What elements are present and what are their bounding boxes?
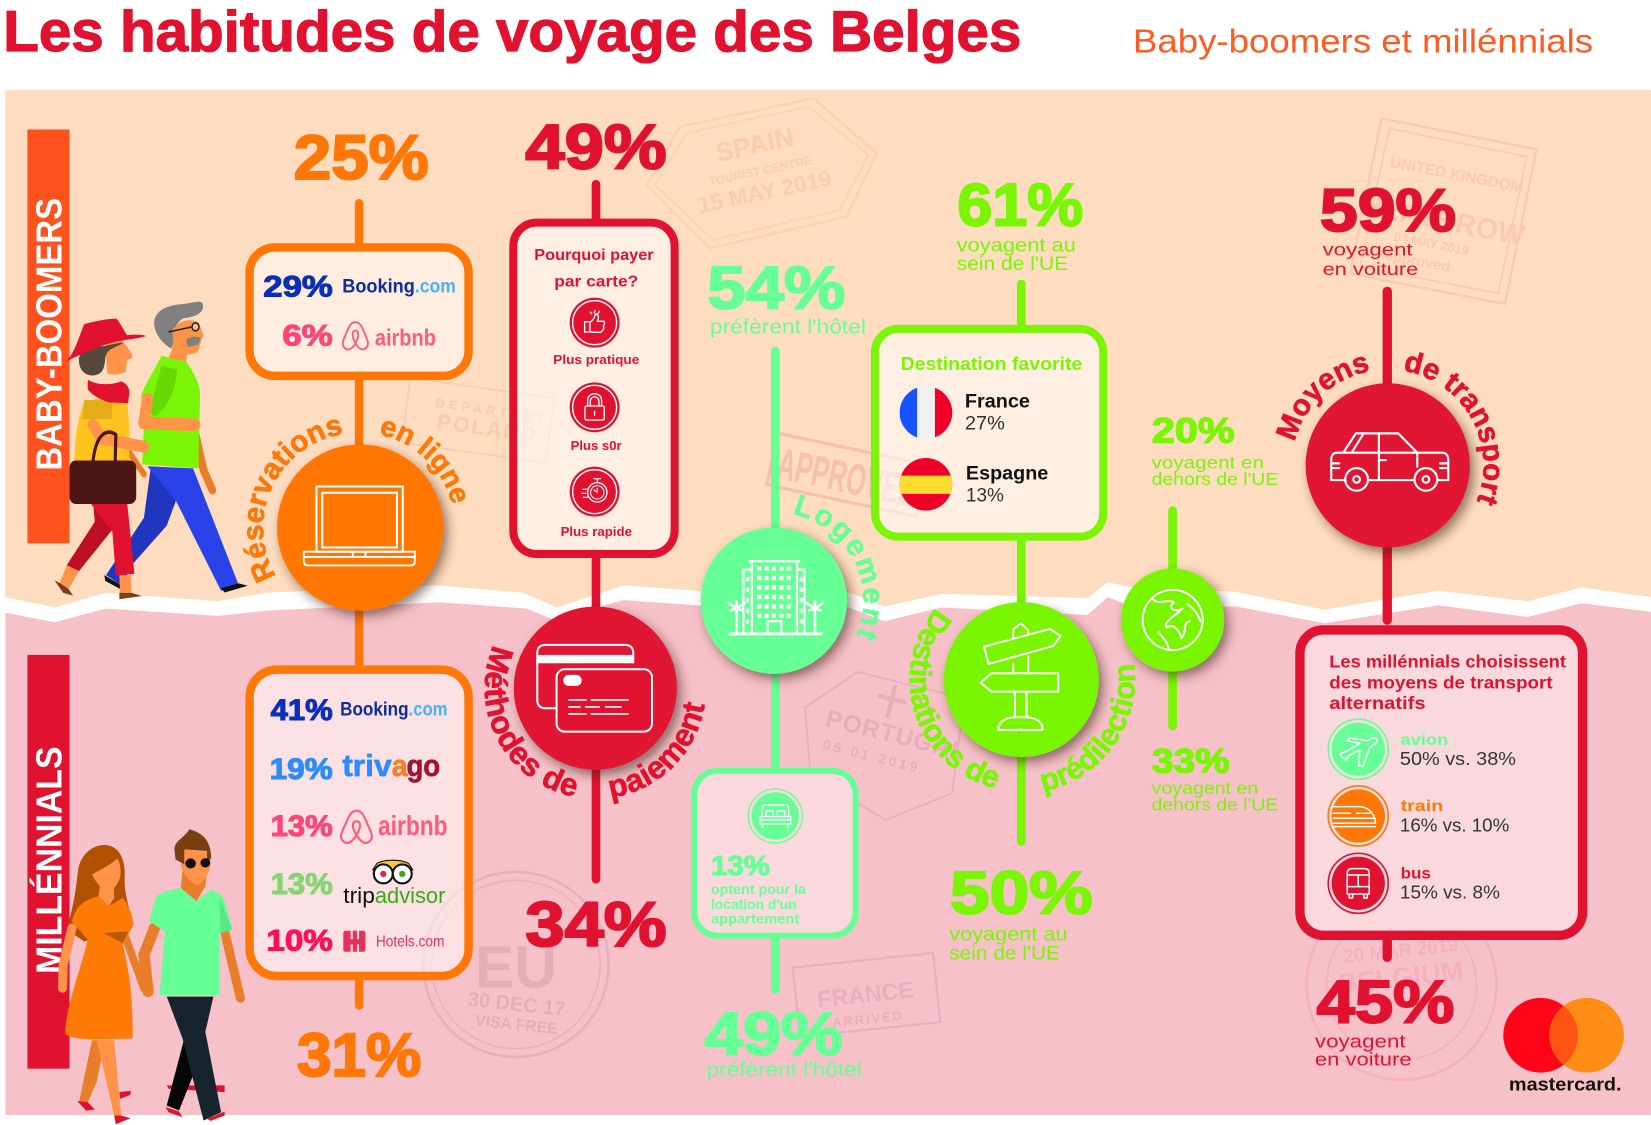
circle: credit cards icon [514,607,677,770]
stamp: Spain: SPAIN [713,122,797,168]
label: Baby-boomers [27,130,70,543]
box: millennial booking sites: 13% [271,810,333,843]
box: millennial booking sites: airbnb [378,810,448,841]
stat: baby-boomers 25%: 25% [294,123,429,193]
caption: travel outside EU [1152,778,1278,815]
box: millennial booking sites: 41% [271,694,333,727]
stat: millennials 45%: 45% [1317,968,1454,1036]
caption: travel outside EU [1152,452,1278,489]
curved heading: Destinations de prédilection: prédilection [1040,664,1136,798]
panel: payment methods [484,112,705,960]
caption: travel outside EU: dehors de l'UE [1152,795,1278,815]
box: baby-boomer booking sites: 6% [282,319,333,352]
box: apartment rental [694,771,856,936]
stamp: United Kingdom: UNITED KINGDOM [1388,154,1525,197]
box: millennials alternative transport: Les millénnials choisissent [1329,651,1566,671]
stamp: Portugal: 05 01 2019 [821,737,922,776]
stamp: EU: VISA FREE [474,1012,558,1038]
box: millennials alternative transport: avion [1401,732,1448,749]
box: why pay by card [513,223,675,554]
stat: baby-boomers 20%: 20% [1152,411,1235,450]
icon: train [1328,786,1388,846]
box: why pay by card: Pourquoi payer [534,247,654,264]
box: millennial booking sites: triv [342,749,392,783]
caption: travel by car [1323,240,1418,279]
box: millennials alternative transport: alternatifs [1329,693,1426,713]
stamp: EU [423,872,609,1057]
curved heading: Méthodes de paiement: Méthodes de [484,646,577,796]
box: millennials alternative transport [1300,630,1583,935]
icon: bed [748,789,802,843]
stat: millennials 31%: 31% [297,1021,421,1089]
caption: prefer hotels: préfèrent l'hôtel [710,316,866,338]
logo: Mastercard: mastercard. [1509,1075,1622,1095]
icon: padlock [570,382,620,432]
icon: Spanish flag [900,458,952,511]
box: favourite destination: Destination favorite [901,353,1082,374]
box: millennial booking sites: 10% [266,924,333,957]
stat: millennials 34%: 34% [525,890,667,960]
icon: French flag [900,386,953,439]
stamp: Poland [401,378,554,463]
box: millennial booking sites [250,670,469,976]
stamp: Approved [767,433,927,518]
icon: plane [1328,719,1388,779]
box: why pay by card: par carte? [554,274,638,291]
label: Millennials [27,655,70,1069]
box: millennials alternative transport: 50% vs. 38% [1400,748,1516,769]
illustration: millennial couple [63,829,240,1124]
caption: travel by car: en voiture [1315,1050,1412,1070]
box: millennial booking sites: trip [343,883,375,908]
circle: globe icon [1121,568,1224,672]
stat: millennials 50%: 50% [950,858,1093,926]
caption: prefer hotels: préfèrent l'hôtel [707,1060,862,1082]
caption: travel within EU: voyagent au [949,925,1068,946]
caption: travel by car: voyagent [1323,240,1413,260]
stat: baby-boomers 59%: 59% [1320,176,1456,244]
curved heading: Destinations de prédilection: Destinations de [909,608,998,788]
box: millennials alternative transport: des moyens de transport [1329,672,1553,692]
box: baby-boomer booking sites: .com [415,277,456,298]
stamp: Belgium: BELGIUM [1336,955,1465,999]
box: millennials alternative transport: 15% vs. 8% [1400,882,1500,903]
label: Baby-boomers: BABY-BOOMERS [30,198,70,471]
curved heading: Destinations de prédilection [909,608,1136,798]
box: millennial booking sites: 13% [271,868,333,901]
stamp: Poland: POLAND [436,411,539,447]
stamp: Belgium [1307,890,1497,1080]
stamp: Poland: DEPARTURE [435,396,551,426]
stamp: Belgium: 20 MAR 2019 [1343,934,1459,967]
box: baby-boomer booking sites: 29% [263,270,333,303]
box: apartment rental: appartement [711,910,800,926]
stamp: Spain: 15 MAY 2019 [695,165,834,218]
curved heading: Réservations en ligne [242,420,466,584]
box: apartment rental: location d'un [711,896,797,912]
caption: travel by car [1315,1032,1412,1070]
caption: travel within EU [949,925,1068,964]
box: why pay by card: Plus pratique [553,352,639,367]
stamp: United Kingdom: 04 MAY 2019 [1393,230,1470,258]
box: millennial booking sites: go [406,749,440,783]
box: why pay by card: Plus s0r [571,438,622,453]
box: favourite destination: 13% [966,486,1004,507]
caption: travel by car: voyagent [1315,1032,1406,1052]
circle: car icon [1306,383,1470,547]
panel: online reservations [242,123,473,1089]
stamp: Spain: TOURIST CENTRE [707,153,813,189]
illustration: baby-boomer couple [54,302,248,599]
box: millennial booking sites: Hotels.com [376,934,444,951]
box: millennial booking sites: Booking [340,699,409,720]
label: Millennials: MILLÉNNIALS [30,746,70,974]
box: baby-boomer booking sites: airbnb [375,324,436,350]
caption: travel by car: en voiture [1323,259,1418,279]
box: why pay by card: Plus rapide [561,524,632,539]
stamp: United Kingdom [1350,118,1537,304]
subtitle: Baby-boomers et millénnials [1133,24,1593,61]
curved heading: Moyens de transport: de transport [1405,352,1500,506]
stamp: EU: EU [475,936,557,1001]
stamp: Approved: APPROVED [773,440,922,517]
box: baby-boomer booking sites: Booking [342,277,415,298]
stamp: Portugal: PORTUGAL [823,705,970,766]
stamp: France: FRANCE [816,976,915,1012]
box: millennial booking sites: .com [409,699,448,720]
caption: travel outside EU: voyagent en [1152,452,1264,472]
panel: transport [1276,176,1624,1095]
caption: travel outside EU: voyagent en [1152,778,1258,798]
stamp: United Kingdom: approved [1384,247,1452,276]
curved heading: Méthodes de paiement [484,646,705,804]
curved heading: Méthodes de paiement: paiement [608,702,705,804]
circle: hotel icon [701,527,847,674]
curved heading: Moyens de transport: Moyens [1276,356,1369,441]
box: millennials alternative transport: 16% vs. 10% [1400,815,1509,836]
curved heading: Réservations en ligne: Réservations [242,420,342,584]
curved heading: Logement: Logement [794,494,880,642]
stat: millennials 49%: 49% [705,999,843,1067]
box: millennial booking sites: advisor [375,883,445,908]
stamp: Spain [647,98,877,248]
box: millennials alternative transport: bus [1401,866,1431,883]
circle: signpost icon [944,602,1099,757]
circle: laptop icon [277,444,443,611]
stamp: France [793,953,940,1037]
curved heading: Réservations en ligne: en ligne [380,421,466,503]
stat: baby-boomers 61%: 61% [957,170,1083,238]
stamp: United Kingdom: HEATHROW [1358,189,1528,252]
logo: Mastercard [1503,998,1624,1095]
box: favourite destination: Espagne [966,463,1049,484]
stat: baby-boomers 54%: 54% [707,254,845,322]
caption: travel outside EU: dehors de l'UE [1152,469,1278,489]
box: favourite destination: France [965,392,1030,413]
stamp: Portugal [783,662,979,835]
box: favourite destination [875,329,1103,537]
box: favourite destination: 27% [965,413,1005,434]
panel: accommodation [691,254,880,1082]
curved heading: Moyens de transport [1276,352,1500,506]
box: apartment rental: 13% [711,850,770,881]
icon: thumbs up [570,298,620,348]
stamp: France: ARRIVED [832,1009,904,1030]
panel: favourite destinations [870,170,1278,964]
box: millennial booking sites: 19% [270,753,333,786]
caption: travel within EU: sein de l'UE [949,943,1060,964]
caption: travel within EU [957,236,1076,275]
icon: stopwatch [570,467,620,517]
caption: travel within EU: sein de l'UE [957,254,1068,275]
caption: travel within EU: voyagent au [957,236,1076,257]
box: millennial booking sites: a [392,749,408,783]
stat: baby-boomers 49%: 49% [525,112,667,182]
stamp: EU: 30 DEC 17 [467,989,566,1021]
box: baby-boomer booking sites [250,247,469,376]
icon: bus [1328,853,1388,913]
box: apartment rental: optent pour la [711,881,806,897]
stat: millennials 33%: 33% [1152,742,1230,780]
title: Les habitudes de voyage des Belges [3,0,1021,64]
box: millennials alternative transport: train [1401,798,1443,815]
